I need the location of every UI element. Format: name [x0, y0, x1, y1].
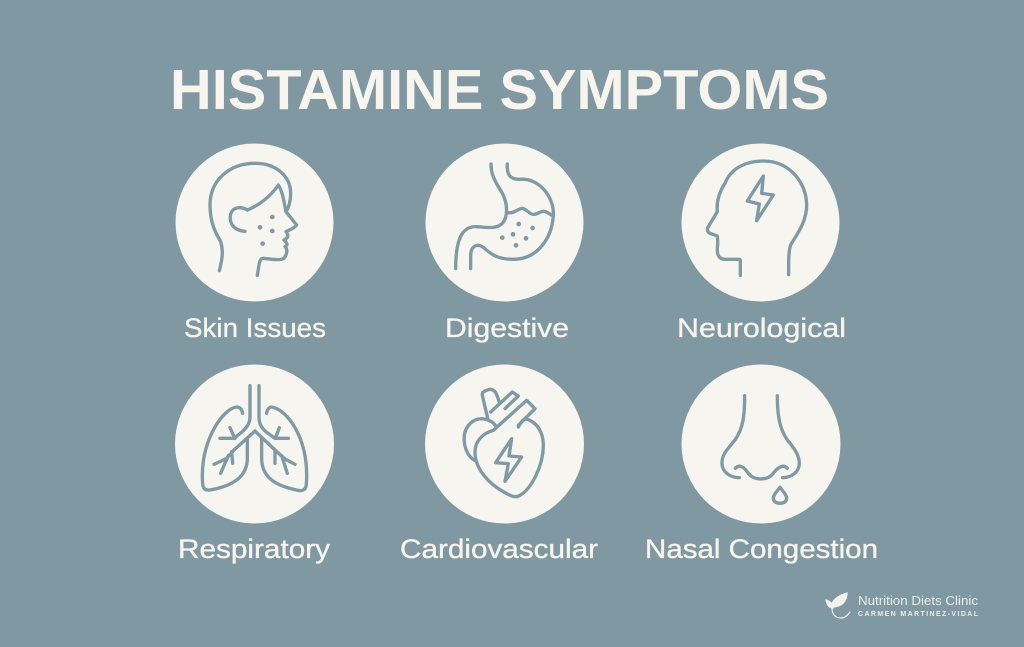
label: cardiovascular: Cardiovascular: [400, 534, 598, 564]
icon: lungs: [202, 386, 307, 491]
label: skin issues: Skin Issues: [184, 313, 326, 343]
panel: skin issues: [176, 144, 334, 343]
icon: leaf: [826, 593, 850, 618]
icon: head with skin spots: [210, 163, 297, 275]
label: neurological: Neurological: [677, 313, 846, 343]
logo: nutrition diets clinic: [826, 593, 979, 618]
icon: heart with lightning bolt: [464, 389, 543, 497]
panel: digestive: [426, 144, 584, 343]
panel: nasal congestion: [645, 364, 878, 564]
label: nasal congestion: Nasal Congestion: [645, 534, 878, 564]
label: respiratory: Respiratory: [178, 534, 331, 564]
title: HISTAMINE SYMPTOMS: [170, 58, 829, 122]
panel: respiratory: [175, 364, 334, 564]
panel: neurological: [677, 144, 846, 343]
icon: head with lightning bolt: [707, 161, 807, 275]
author name: CARMEN MARTINEZ-VIDAL: [858, 611, 979, 618]
brand name: Nutrition Diets Clinic: [858, 594, 978, 608]
panel: cardiovascular: [400, 364, 598, 564]
icon: nose with drop: [722, 396, 799, 503]
icon: stomach: [456, 164, 553, 269]
label: digestive: Digestive: [445, 313, 569, 343]
